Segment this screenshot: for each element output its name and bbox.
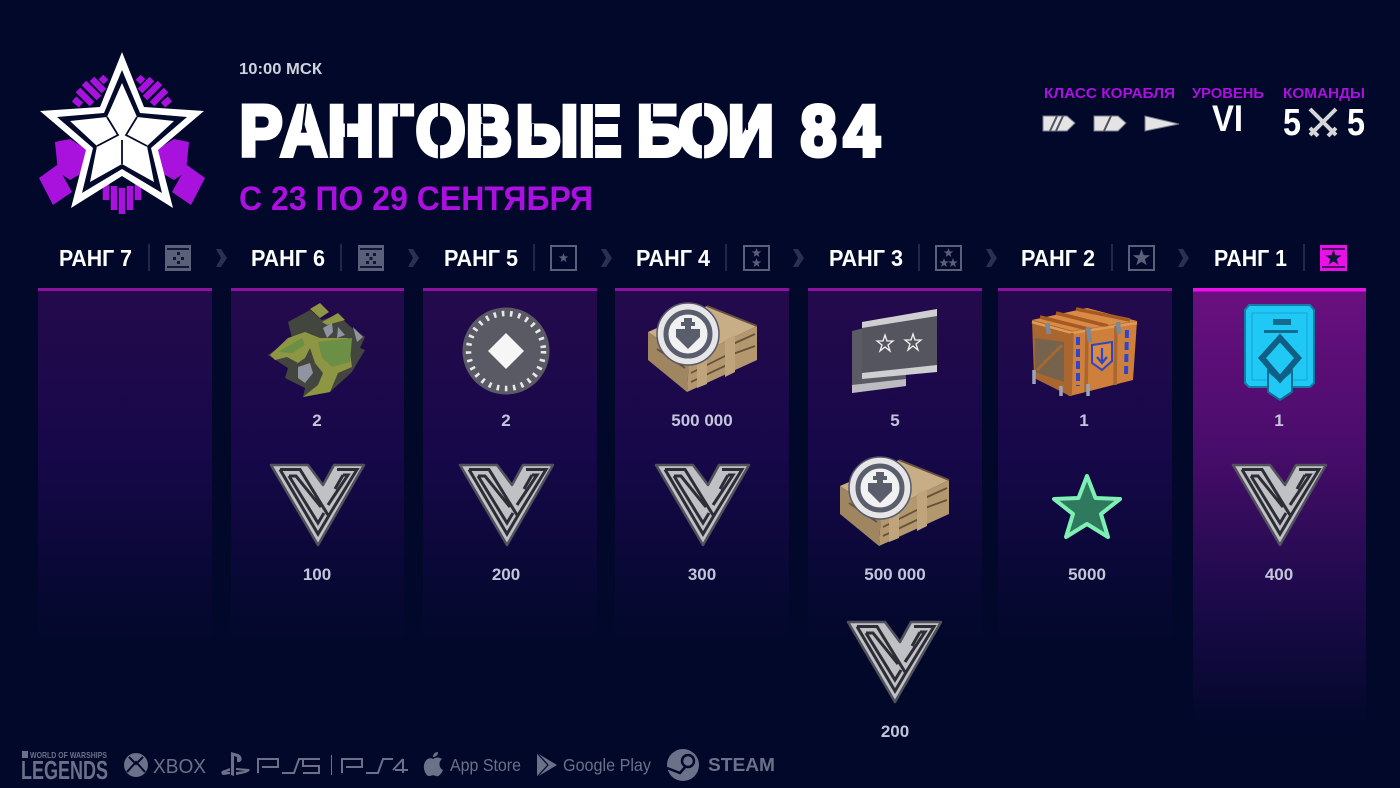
icon: credits crate (648, 303, 757, 392)
title: РАНГОВЫЕ БОИ 84 (240, 92, 880, 171)
ship class label: КЛАСС КОРАБЛЯ (1044, 85, 1175, 102)
level value: VI (1212, 98, 1243, 139)
camouflage count: 2 (312, 411, 322, 430)
rank 3 heading (829, 244, 961, 271)
icon: commander points (460, 465, 553, 545)
commander points count: 200 (492, 565, 520, 584)
subtitle dates: С 23 ПО 29 СЕНТЯБРЯ (239, 180, 593, 218)
logo: ranked star emblem (39, 52, 205, 214)
panel: rank 7 (38, 288, 212, 650)
icon: battleship (1145, 116, 1179, 131)
certificate count: 1 (1274, 411, 1284, 430)
time label: 10:00 МСК (239, 61, 323, 78)
logo: Steam (667, 749, 775, 781)
rank 1 heading (1214, 244, 1347, 271)
rank 5 heading: РАНГ 5 (444, 245, 518, 271)
icon: certificate (1245, 305, 1314, 400)
star count: 5000 (1068, 565, 1106, 584)
arrow (1178, 249, 1189, 267)
panel: rank 1 (1193, 288, 1366, 730)
credits count: 500 000 (671, 411, 733, 430)
logo: World of Warships Legends (21, 750, 108, 785)
rank 2 heading (1021, 244, 1154, 271)
panel: rank 6 (231, 288, 404, 650)
arrow (408, 249, 419, 267)
panel: rank 5 (423, 288, 597, 650)
logo: World of Warships Legends: LEGENDS (21, 755, 108, 785)
icon: cruiser (1094, 116, 1126, 131)
rank progression header (59, 244, 1347, 271)
rank 5 heading (444, 244, 576, 271)
logo: Google Play: Google Play (563, 755, 651, 775)
arrow (793, 249, 804, 267)
rank 4 heading: РАНГ 4 (636, 245, 710, 271)
rank 4 heading (636, 244, 769, 271)
commander points count: 300 (688, 565, 716, 584)
rank 2 heading: РАНГ 2 (1021, 245, 1095, 271)
rank 1 heading: РАНГ 1 (1214, 245, 1287, 271)
rank 3 heading: РАНГ 3 (829, 245, 903, 271)
level label: УРОВЕНЬ (1192, 85, 1264, 102)
panel: rank 3 (808, 288, 982, 741)
icon: premium crate (1032, 308, 1137, 396)
logo: Google Play (537, 753, 651, 777)
teams label: КОМАНДЫ (1283, 85, 1365, 102)
commander points count: 200 (881, 722, 909, 741)
panel: rank 4 (615, 288, 789, 650)
team size right: 5 (1347, 102, 1365, 144)
battle parameters (1043, 85, 1365, 144)
rank 7 heading (59, 244, 191, 271)
panel: rank 2 (998, 288, 1172, 650)
logo: Xbox (124, 753, 206, 778)
commander points count: 100 (303, 565, 331, 584)
commander points count: 400 (1265, 565, 1293, 584)
icon: destroyer (1043, 116, 1075, 131)
logo: App Store: App Store (450, 755, 521, 775)
credits count: 500 000 (864, 565, 926, 584)
icon: green star currency (1054, 476, 1120, 537)
rank 6 heading (251, 244, 384, 271)
logo: Steam: STEAM (708, 755, 775, 775)
icon: crossed swords (1310, 109, 1336, 136)
icon: commander points (848, 622, 941, 702)
icon: camouflage (268, 303, 365, 397)
icon: commander points (656, 465, 749, 545)
flags count: 5 (890, 411, 900, 430)
icon: star flags (852, 309, 937, 393)
rank 6 heading: РАНГ 6 (251, 245, 325, 271)
icon: commander points (1233, 465, 1326, 545)
platform logos footer (21, 749, 775, 785)
icon: credits crate (840, 457, 949, 546)
arrow (216, 249, 227, 267)
crate count: 1 (1079, 411, 1089, 430)
logo: PlayStation 5 and 4 (221, 752, 408, 776)
arrow (986, 249, 997, 267)
logo: World of Warships Legends: WORLD OF WARSHIPS (30, 750, 107, 760)
arrow (601, 249, 612, 267)
logo: Xbox: XBOX (153, 756, 206, 778)
team size left: 5 (1283, 102, 1301, 144)
logo: App Store (424, 752, 521, 776)
rank 7 heading: РАНГ 7 (59, 245, 132, 271)
icon: commander points (271, 465, 364, 545)
disc count: 2 (501, 411, 511, 430)
icon: signal disc (462, 308, 550, 394)
